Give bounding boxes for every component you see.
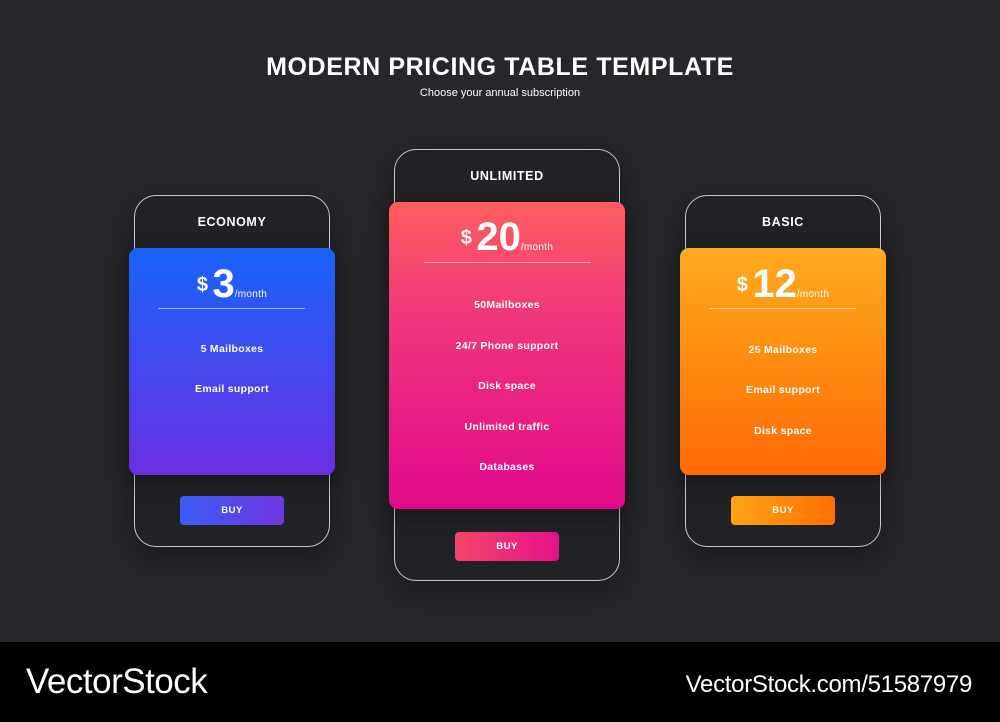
features: 25 Mailboxes [749, 344, 817, 356]
features: 5 Mailboxes [201, 343, 263, 355]
features: 50Mailboxes [474, 299, 540, 311]
price panel [680, 248, 886, 475]
buy button: BUY [496, 541, 518, 552]
title: MODERN PRICING TABLE TEMPLATE [266, 53, 734, 81]
card: economy [124, 195, 340, 556]
price: $ 3/month [197, 262, 267, 306]
buy button: BUY [772, 505, 794, 516]
card: basic [674, 195, 892, 556]
plan name: UNLIMITED [470, 169, 544, 183]
features [746, 344, 820, 437]
features [456, 299, 558, 473]
footer bar [0, 642, 1000, 722]
buy button [731, 496, 835, 525]
price panel [129, 248, 335, 475]
features: Email support [195, 383, 269, 395]
features: Disk space [754, 425, 812, 437]
features: Databases [479, 461, 535, 473]
card outline [134, 195, 330, 547]
features: Email support [746, 384, 820, 396]
subtitle: Choose your annual subscription [420, 87, 580, 99]
plan name: BASIC [762, 215, 804, 229]
features: Disk space [478, 380, 536, 392]
card outline [685, 195, 881, 547]
features: 24/7 Phone support [456, 340, 558, 352]
price panel [389, 202, 625, 509]
buy button: BUY [221, 505, 243, 516]
card outline [394, 149, 620, 581]
price: $ 12/month [737, 262, 829, 306]
features: Unlimited traffic [464, 421, 550, 433]
footer url: VectorStock.com/51587979 [686, 671, 972, 698]
card: unlimited [384, 149, 630, 590]
price: $ 20/month [461, 215, 553, 259]
buy button [180, 496, 284, 525]
buy button [455, 532, 559, 561]
plan name: ECONOMY [198, 215, 266, 229]
footer logo: VectorStock [26, 662, 207, 701]
features [195, 343, 269, 395]
